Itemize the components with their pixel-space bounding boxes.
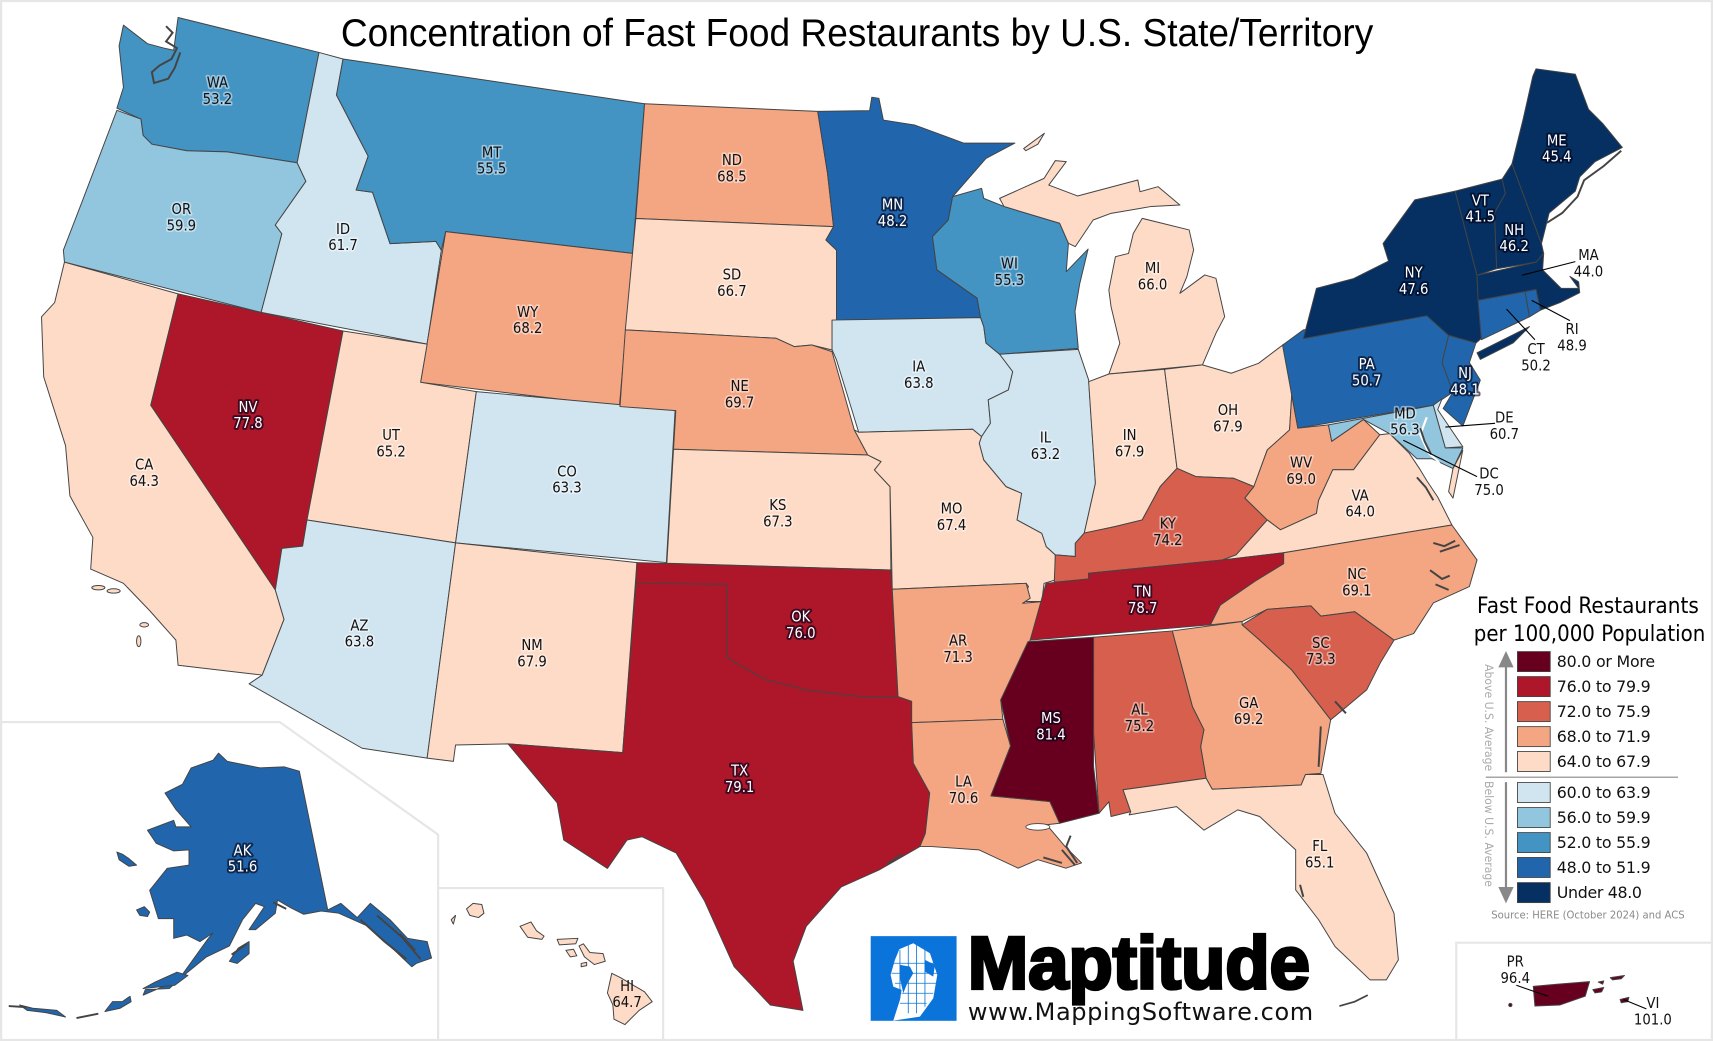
above average label: Above U.S. Average: [1482, 664, 1496, 771]
label: NY: 47.6: [1399, 281, 1428, 298]
inset: Hawaii: [451, 903, 652, 1025]
label: NE: NE: [730, 378, 749, 395]
title: Concentration of Fast Food Restaurants by U.S. State/Territory: [341, 11, 1374, 55]
legend row 72: [1517, 702, 1651, 722]
state: Mississippi: [991, 637, 1099, 823]
label: WV: 69.0: [1286, 471, 1316, 488]
label: IA: 63.8: [904, 375, 934, 392]
label: OR: OR: [172, 201, 191, 218]
label: CT: CT: [1527, 341, 1546, 358]
state: Alabama: [1094, 631, 1206, 817]
inset: Puerto Rico and Virgin Islands: [1509, 975, 1629, 1007]
legend row 72: 72.0 to 75.9: [1557, 702, 1651, 721]
label: NJ: NJ: [1458, 365, 1472, 382]
label: UT: 65.2: [376, 444, 406, 461]
logo url: www.MappingSoftware.com: [968, 998, 1313, 1026]
state: Virginia: [1222, 434, 1452, 560]
state: Minnesota: [818, 97, 1015, 320]
state: New Mexico: [427, 543, 637, 761]
label: FL: 65.1: [1305, 854, 1334, 871]
legend row 76: [1517, 677, 1651, 697]
label: PA: PA: [1359, 356, 1375, 373]
state: Arizona: [249, 520, 456, 758]
label: MI: 66.0: [1138, 276, 1167, 293]
label: IL: IL: [1040, 429, 1052, 446]
legend row 52: 52.0 to 55.9: [1557, 833, 1651, 852]
legend row 64: [1517, 752, 1651, 772]
state: Wyoming: [421, 232, 633, 406]
label: MA: 44.0: [1574, 263, 1603, 280]
logo icon: [871, 936, 957, 1021]
legend row 68: [1517, 727, 1651, 747]
decorative rough coastlines: [152, 26, 1621, 897]
state: Rhode Island: [1525, 289, 1540, 317]
state: Georgia: [1172, 622, 1331, 789]
label: ME: 45.4: [1542, 149, 1572, 166]
label: MD: 56.3: [1390, 422, 1420, 439]
label: HI: 64.7: [612, 994, 642, 1011]
state: Iowa: [832, 318, 1013, 437]
state: Isle Royale (Michigan): [1024, 133, 1044, 151]
label: RI: RI: [1566, 321, 1579, 338]
label: NM: 67.9: [517, 653, 547, 670]
label: FL: FL: [1312, 838, 1328, 855]
label: MS: 81.4: [1036, 727, 1066, 744]
state: Colorado: [456, 392, 675, 563]
label: OK: 76.0: [786, 625, 816, 642]
label: NC: 69.1: [1342, 582, 1372, 599]
label: VT: VT: [1472, 192, 1490, 209]
label: GA: 69.2: [1234, 711, 1263, 728]
decorative: Alaska rough coast: [9, 902, 421, 1018]
legend row 48: [1517, 857, 1651, 877]
label: IN: IN: [1123, 427, 1137, 444]
label: MI: MI: [1145, 260, 1160, 277]
label: MO: 67.4: [937, 517, 966, 534]
label: OH: 67.9: [1213, 418, 1243, 435]
divider: [1486, 776, 1678, 778]
label: ID: 61.7: [328, 237, 358, 254]
label: VA: 64.0: [1345, 504, 1375, 521]
label: AK: AK: [234, 842, 252, 859]
label: PA: 50.7: [1352, 373, 1381, 390]
label: WI: WI: [1001, 256, 1018, 273]
label: DC: DC: [1479, 465, 1499, 482]
label: MS: MS: [1041, 710, 1061, 727]
label: SD: SD: [723, 267, 741, 284]
state: South Carolina: [1242, 606, 1394, 720]
below average label: Below U.S. Average: [1482, 781, 1496, 887]
legend row 56: 56.0 to 59.9: [1557, 808, 1651, 827]
label: DE: 60.7: [1490, 426, 1519, 443]
state: Virginia eastern shore: [1449, 450, 1463, 498]
state: Washington: [117, 17, 319, 163]
label: ND: ND: [722, 152, 742, 169]
label: ND: 68.5: [717, 168, 747, 185]
decorative: Florida Keys: [1339, 995, 1368, 1006]
logo: Maptitude: [871, 922, 1313, 1026]
label: MA: MA: [1578, 247, 1599, 264]
label: MT: MT: [482, 144, 502, 161]
state: West Virginia: [1245, 395, 1380, 530]
state: Kansas: [667, 449, 891, 570]
label: PR: 96.4: [1501, 970, 1530, 987]
label: CA: 64.3: [129, 473, 159, 490]
above average arrow: [1498, 651, 1514, 772]
label: MT: 55.5: [477, 161, 506, 178]
state: Louisiana: [912, 719, 1082, 868]
state: Utah: [307, 331, 476, 543]
state: Connecticut: [1478, 292, 1529, 340]
label: PR: PR: [1507, 954, 1524, 971]
state: Massachusetts: [1477, 253, 1580, 310]
state: California: [42, 262, 284, 675]
logo wordmark: Maptitude: [968, 922, 1310, 1005]
state: Arkansas: [892, 583, 1042, 723]
label: DE: DE: [1495, 410, 1514, 427]
legend row under 48: Under 48.0: [1557, 883, 1642, 902]
label: TX: 79.1: [725, 779, 754, 796]
state: Pennsylvania: [1283, 316, 1453, 428]
label: SC: SC: [1312, 635, 1330, 652]
label: WI: 55.3: [995, 272, 1024, 289]
state: Vermont: [1455, 179, 1505, 275]
label: HI: HI: [620, 978, 634, 995]
label: NY: NY: [1405, 264, 1424, 281]
label: MN: 48.2: [878, 213, 907, 230]
label: RI: 48.9: [1557, 338, 1587, 355]
state: Texas: [508, 583, 930, 1010]
label: OR: 59.9: [167, 217, 196, 234]
state: Delaware: [1433, 399, 1463, 448]
state: Tennessee: [1030, 553, 1284, 640]
legend row 68: 68.0 to 71.9: [1557, 727, 1651, 746]
leader lines: [1403, 262, 1646, 1009]
label: NH: 46.2: [1499, 238, 1529, 255]
state: Alaska main: [143, 753, 432, 995]
legend row 80+: 80.0 or More: [1557, 652, 1655, 671]
label: AL: 75.2: [1125, 718, 1154, 735]
label: KS: KS: [769, 497, 786, 514]
label: WA: WA: [207, 74, 228, 91]
state: Oklahoma: [636, 563, 898, 697]
label: KY: KY: [1160, 516, 1177, 533]
label: KY: 74.2: [1153, 532, 1183, 549]
state: South Dakota: [625, 218, 837, 350]
label: WV: WV: [1290, 455, 1312, 472]
legend row 64: 64.0 to 67.9: [1557, 752, 1651, 771]
label: NJ: 48.1: [1450, 381, 1480, 398]
state: Alaska islands: [20, 852, 249, 1017]
state: North Carolina: [1210, 525, 1477, 640]
label: CA: CA: [135, 457, 153, 474]
label: AZ: AZ: [350, 617, 369, 634]
state: Montana: [336, 59, 645, 253]
legend row 80+: [1517, 652, 1655, 672]
state: Michigan lower peninsula: [1109, 218, 1225, 374]
label: WY: WY: [517, 304, 539, 321]
label: MO: MO: [941, 500, 962, 517]
label: SD: 66.7: [717, 283, 747, 300]
state: Oregon: [63, 110, 306, 312]
below average arrow: [1498, 782, 1514, 903]
legend row 60: 60.0 to 63.9: [1557, 783, 1651, 802]
label: AK: 51.6: [228, 859, 257, 876]
state: Kentucky: [1054, 468, 1267, 582]
label: NV: NV: [238, 399, 257, 416]
state: Idaho: [261, 52, 441, 344]
label: NV: 77.8: [233, 415, 263, 432]
legend row 48: 48.0 to 51.9: [1557, 858, 1651, 877]
state: Nebraska: [620, 330, 868, 455]
label: AR: 71.3: [943, 649, 973, 666]
label: ID: ID: [336, 221, 350, 238]
state: North Dakota: [636, 104, 834, 227]
label: AL: AL: [1131, 701, 1148, 718]
label: WY: 68.2: [513, 320, 542, 337]
state: Wisconsin: [932, 188, 1088, 354]
legend title: Fast Food Restaurants: [1477, 594, 1699, 619]
state: Indiana: [1084, 369, 1177, 533]
label: TN: 78.7: [1128, 600, 1157, 617]
label: SC: 73.3: [1306, 651, 1336, 668]
label: IL: 63.2: [1031, 446, 1060, 463]
label: VI: 101.0: [1634, 1012, 1672, 1029]
label: NE: 69.7: [725, 394, 754, 411]
label: KS: 67.3: [763, 514, 793, 531]
legend row 76: 76.0 to 79.9: [1557, 677, 1651, 696]
label: TX: TX: [730, 763, 748, 780]
legend row 56: [1517, 808, 1651, 828]
state: Missouri: [854, 429, 1055, 602]
state: Illinois: [979, 349, 1095, 557]
label: GA: GA: [1239, 695, 1258, 712]
state: Maine: [1512, 69, 1622, 244]
state: Florida: [1123, 774, 1398, 980]
label: OH: OH: [1218, 402, 1238, 419]
state: Nevada: [151, 294, 343, 590]
label: VT: 41.5: [1466, 209, 1495, 226]
state: Michigan upper peninsula: [1000, 161, 1180, 247]
label: CO: 63.3: [552, 480, 582, 497]
label: OK: OK: [791, 609, 811, 626]
label: LA: 70.6: [949, 790, 978, 807]
label: NC: NC: [1347, 566, 1366, 583]
decorative: Lake Pontchartrain: [1026, 824, 1050, 830]
label: MN: MN: [882, 197, 903, 214]
state: Ohio: [1165, 344, 1292, 487]
state: Long Island (New York): [1477, 327, 1529, 359]
state: New Hampshire: [1495, 164, 1544, 269]
label: LA: LA: [955, 773, 972, 790]
legend row 60: [1517, 783, 1651, 803]
label: CT: 50.2: [1521, 357, 1551, 374]
state: New Jersey: [1442, 335, 1480, 426]
label: NH: NH: [1504, 222, 1524, 239]
label: VI: VI: [1646, 995, 1659, 1012]
label: NM: NM: [521, 637, 543, 654]
label: VA: VA: [1352, 487, 1369, 504]
source note: Source: HERE (October 2024) and ACS: [1491, 909, 1685, 922]
label: IN: 67.9: [1115, 444, 1144, 461]
coastal islands: California Channel: [92, 585, 149, 647]
state: New York: [1303, 191, 1484, 343]
state: Chesapeake Bay: [1420, 417, 1444, 472]
label: ME: ME: [1547, 132, 1567, 149]
label: IA: IA: [912, 358, 925, 375]
label: DC: 75.0: [1474, 482, 1504, 499]
label: AZ: 63.8: [345, 634, 374, 651]
label: UT: UT: [382, 427, 401, 444]
legend row under 48: [1517, 883, 1642, 903]
label: WA: 53.2: [203, 91, 232, 108]
state: Maryland: [1328, 405, 1463, 469]
label: MD: MD: [1394, 405, 1416, 422]
label: CO: CO: [557, 463, 577, 480]
label: TN: TN: [1133, 583, 1152, 600]
inset: Alaska: [20, 753, 432, 1017]
label: AR: AR: [949, 633, 967, 650]
legend row 52: [1517, 833, 1651, 853]
legend: [1474, 594, 1705, 922]
